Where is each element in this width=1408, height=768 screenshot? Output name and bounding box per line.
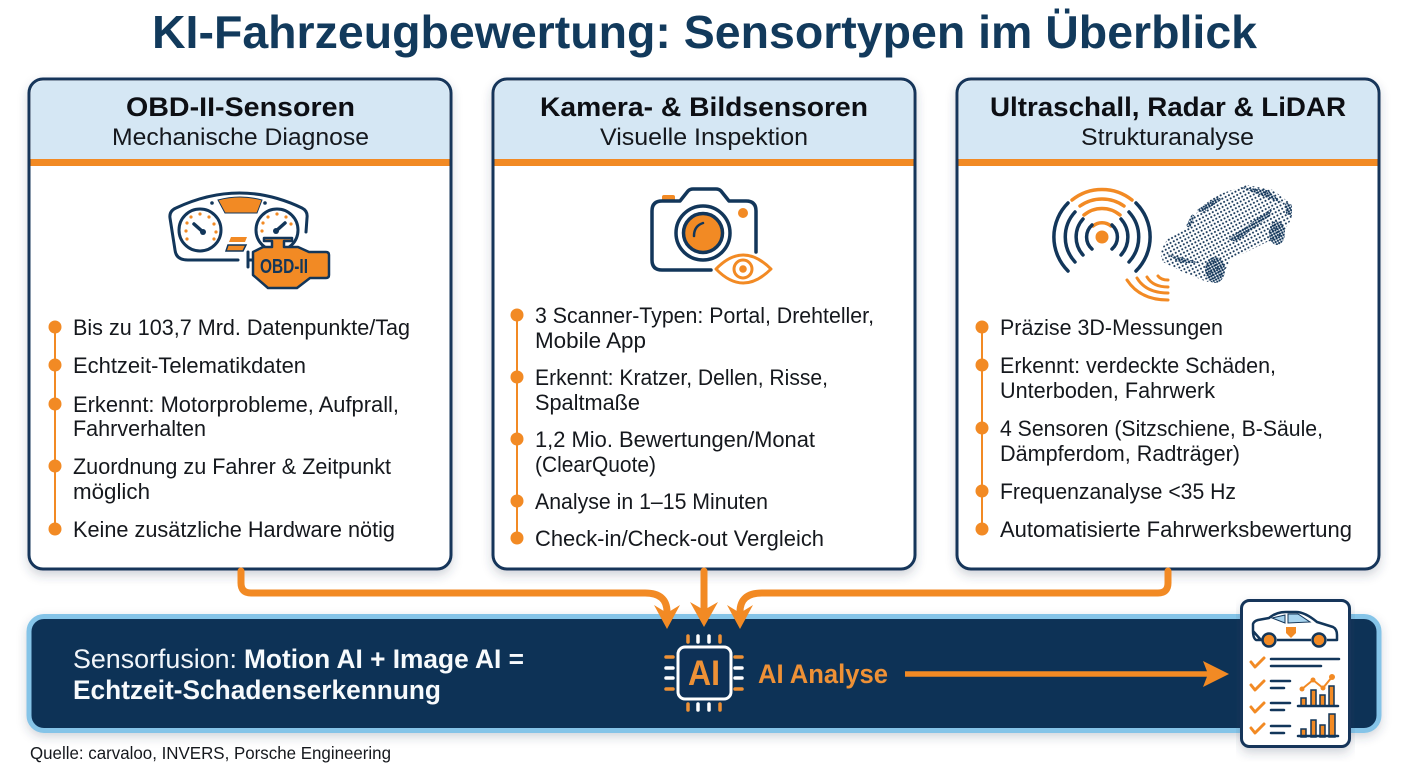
heading: OBD-II-Sensoren	[126, 92, 355, 122]
bullet list	[976, 315, 1352, 542]
text: sensor fusion statement: Echtzeit-Schadenserkennung	[73, 675, 441, 705]
bullet list: 1,2 Mio. Bewertungen/Monat	[535, 427, 815, 452]
car illustration	[1253, 612, 1337, 646]
text: sensor fusion statement	[73, 644, 524, 705]
bullet list: Automatisierte Fahrwerksbewertung	[1000, 517, 1352, 542]
subheading: Visuelle Inspektion	[600, 124, 808, 151]
label: AI analysis: AI Analyse	[758, 659, 888, 689]
icon: point-cloud car	[1160, 185, 1292, 283]
heading: Kamera- & Bildsensoren	[540, 92, 868, 122]
bullet list: Zuordnung zu Fahrer & Zeitpunkt	[73, 454, 391, 479]
text: sensor fusion statement: Sensorfusion:	[73, 644, 237, 674]
panel: ultrasonic, radar and LiDAR	[957, 79, 1379, 569]
panel: sensor fusion bar	[29, 616, 1379, 730]
bullet list: Erkennt: Motorprobleme, Aufprall,	[73, 392, 399, 417]
bullet list: Spaltmaße	[535, 390, 640, 415]
bar charts	[1298, 674, 1338, 737]
text: sensor fusion statement: Motion AI + Image AI =	[244, 644, 524, 674]
subheading: Strukturanalyse	[1081, 124, 1254, 151]
icon: small sensor signal	[1127, 276, 1168, 300]
source note: Quelle: carvaloo, INVERS, Porsche Engineering	[30, 743, 391, 763]
panel: camera and image sensors	[493, 79, 915, 569]
icon: radar waves	[1054, 189, 1150, 271]
bullet list	[510, 303, 874, 551]
title: KI-Fahrzeugbewertung: Sensortypen im Überblick	[152, 6, 1257, 58]
bullet list: Erkennt: verdeckte Schäden,	[1000, 353, 1276, 378]
bullet list: 3 Scanner-Typen: Portal, Drehteller,	[535, 303, 874, 328]
panel: OBD-II sensors	[29, 79, 451, 569]
bullet list: Dämpferdom, Radträger)	[1000, 441, 1240, 466]
bullet list: Bis zu 103,7 Mrd. Datenpunkte/Tag	[73, 315, 410, 340]
bullet list: Analyse in 1–15 Minuten	[535, 489, 768, 514]
icon: dashboard and engine	[170, 193, 329, 288]
bullet list: Check-in/Check-out Vergleich	[535, 526, 824, 551]
bullet list: Mobile App	[535, 328, 646, 353]
bullet list: möglich	[73, 479, 150, 504]
icon: AI chip: AI	[688, 654, 720, 693]
bullet list: 4 Sensoren (Sitzschiene, B-Säule,	[1000, 416, 1323, 441]
bullet list: Fahrverhalten	[73, 416, 206, 441]
subheading: Mechanische Diagnose	[112, 124, 369, 151]
bullet list	[48, 315, 410, 542]
icon: camera and eye	[652, 189, 771, 283]
heading: Ultraschall, Radar & LiDAR	[990, 92, 1346, 122]
bullet list: Unterboden, Fahrwerk	[1000, 378, 1216, 403]
bullet list: Präzise 3D-Messungen	[1000, 315, 1223, 340]
icon: report document	[1242, 600, 1350, 746]
arrow: analysis to report	[905, 661, 1229, 687]
icon: AI chip	[666, 636, 742, 710]
bullet list: Erkennt: Kratzer, Dellen, Risse,	[535, 365, 828, 390]
icon: dashboard and engine: OBD-II	[260, 256, 308, 278]
bullet list: Frequenzanalyse <35 Hz	[1000, 479, 1236, 504]
bullet list: (ClearQuote)	[535, 452, 656, 477]
bullet list: Echtzeit-Telematikdaten	[73, 353, 306, 378]
bullet list: Keine zusätzliche Hardware nötig	[73, 517, 395, 542]
arrows: sensor cards to AI analysis	[241, 571, 1168, 629]
checklist	[1251, 658, 1339, 733]
